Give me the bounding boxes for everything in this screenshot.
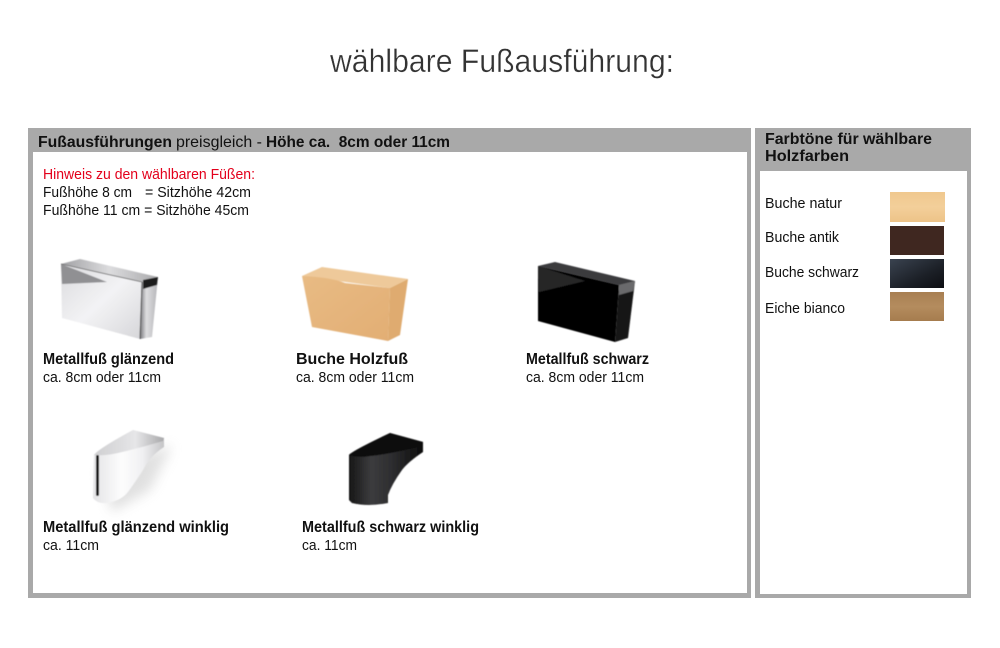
caption: black metal foot: ca. 8cm oder 11cm	[526, 369, 644, 386]
caption: black metal foot: Metallfuß schwarz	[526, 351, 649, 368]
panel heading: foot options: preisgleich -	[176, 134, 262, 151]
icon: polished angled metal foot	[93, 430, 172, 512]
title: wählbare Fußausführung:	[329, 43, 674, 79]
caption: beech wood foot	[296, 351, 414, 386]
icon: black metal foot	[538, 262, 635, 342]
colour: Eiche bianco: Eiche bianco	[765, 300, 845, 317]
caption: beech wood foot: Buche Holzfuß	[296, 351, 408, 368]
caption: polished angled metal foot: ca. 11cm	[43, 537, 99, 554]
note: height and seat height	[43, 166, 255, 219]
caption: black angled metal foot	[302, 519, 479, 554]
note: height and seat height: Hinweis zu den wählbaren Füßen:	[43, 166, 255, 183]
colour: Buche natur: Buche natur	[765, 195, 842, 212]
panel: wood colours	[755, 128, 971, 598]
colour: Buche schwarz: Buche schwarz	[765, 264, 859, 281]
caption: polished metal foot: ca. 8cm oder 11cm	[43, 369, 161, 386]
panel heading: wood colours: Farbtöne für wählbare	[765, 131, 932, 148]
caption: polished angled metal foot: Metallfuß glänzend winklig	[43, 519, 229, 536]
panel: foot options	[28, 128, 751, 598]
caption: beech wood foot: ca. 8cm oder 11cm	[296, 369, 414, 386]
icon: polished metal foot	[61, 259, 158, 339]
note: height and seat height: Fußhöhe 8 cm	[43, 184, 132, 201]
panel heading: wood colours	[765, 131, 932, 165]
note: height and seat height: = Sitzhöhe 42cm	[145, 184, 251, 201]
panel heading: foot options: Fußausführungen	[38, 134, 172, 151]
caption: black metal foot	[526, 351, 649, 386]
caption: black angled metal foot: Metallfuß schwarz winklig	[302, 519, 479, 536]
caption: black angled metal foot: ca. 11cm	[302, 537, 357, 554]
panel heading: foot options: Höhe ca. 8cm oder 11cm	[266, 134, 450, 151]
icon: black angled metal foot	[349, 433, 423, 505]
caption: polished angled metal foot	[43, 519, 229, 554]
panel heading: foot options	[38, 134, 450, 151]
colour: Buche schwarz	[765, 259, 944, 288]
colour: Buche natur	[765, 192, 945, 222]
colour: Buche antik: Buche antik	[765, 229, 839, 246]
panel heading: wood colours: Holzfarben	[765, 148, 849, 165]
caption: polished metal foot: Metallfuß glänzend	[43, 351, 174, 368]
caption: polished metal foot	[43, 351, 174, 386]
colour: Buche antik	[765, 226, 944, 255]
note: height and seat height: Fußhöhe 11 cm = Sitzhöhe 45cm	[43, 202, 249, 219]
icon: beech wood foot	[302, 267, 408, 341]
colour: Eiche bianco	[765, 292, 944, 321]
